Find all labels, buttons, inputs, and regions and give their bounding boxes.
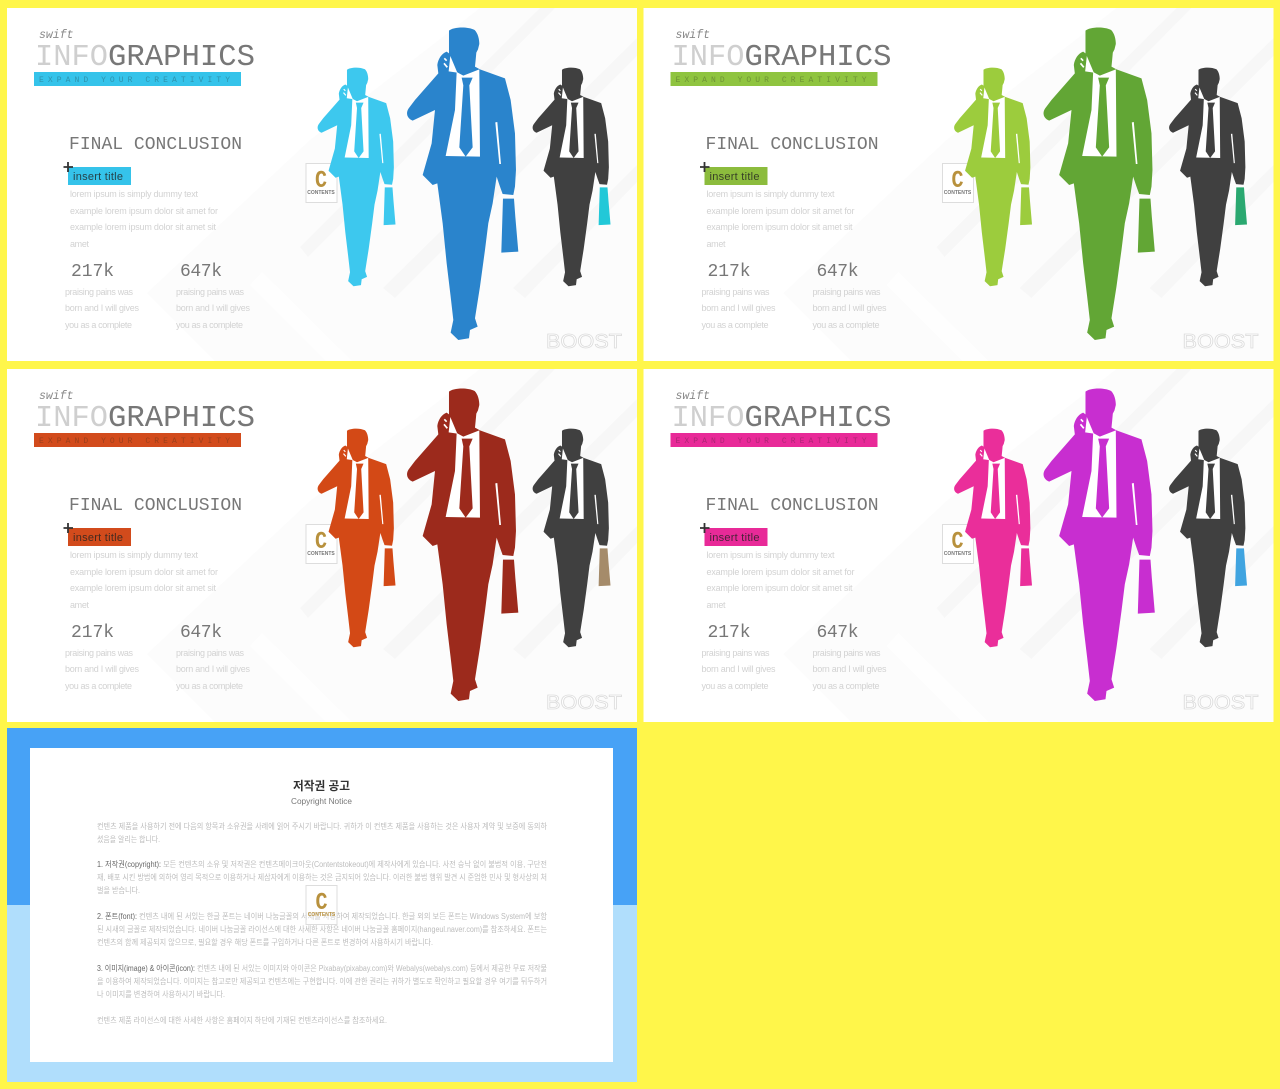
logo: C — [952, 529, 964, 556]
logo — [306, 524, 337, 564]
title: GRAPHICS — [744, 402, 892, 436]
insert title label — [700, 162, 768, 185]
panel: green slide — [644, 8, 1274, 361]
insert title label: insert title — [710, 532, 760, 544]
body text: example lorem ipsum dolor sit amet sit — [70, 222, 216, 232]
title: swift — [676, 390, 710, 403]
stat: 217k: 217k — [71, 623, 114, 643]
notice section 2: 컨텐츠의 함께 제공되지 않으므로, 필요할 경우 해당 폰트를 구입하거나 다른 폰트로 변경하여 사용하시기 바랍니다. — [97, 937, 433, 947]
notice intro: 셨음을 알리는 합니다. — [97, 834, 160, 844]
body text: lorem ipsum is simply dummy text — [706, 550, 835, 560]
logo: C — [316, 890, 328, 917]
subtitle bar: EXPAND YOUR CREATIVITY — [676, 437, 867, 446]
body text — [70, 550, 218, 610]
logo: CONTENTS — [308, 912, 336, 918]
insert title label: insert title — [710, 171, 760, 183]
notice section 3: 3. 이미지(image) & 아이콘(icon): — [97, 963, 195, 973]
title — [35, 29, 255, 75]
body text — [70, 189, 218, 249]
notice heading: 저작권 공고 — [293, 778, 350, 793]
silhouette: large man — [407, 28, 518, 340]
title: swift — [676, 29, 710, 42]
stat: 647k: you as a complete — [176, 320, 243, 330]
subtitle bar — [34, 72, 241, 86]
subtitle bar — [670, 433, 878, 447]
logo: C — [315, 529, 327, 556]
stat: 647k: born and I will gives — [812, 664, 887, 674]
stat: 647k: you as a complete — [812, 320, 880, 330]
stat: 647k: praising pains was — [176, 648, 244, 658]
silhouette: large man — [1044, 389, 1155, 701]
panel: copyright notice — [7, 728, 637, 1082]
heading: FINAL CONCLUSION — [69, 496, 242, 516]
logo — [942, 164, 974, 202]
stat: 647k: praising pains was — [812, 287, 881, 297]
stat: 647k: born and I will gives — [176, 303, 250, 313]
stat: 217k: born and I will gives — [65, 303, 140, 313]
title: GRAPHICS — [744, 41, 892, 75]
notice section 2: 2. 폰트(font): — [97, 912, 137, 921]
stat: 647k — [176, 623, 250, 691]
stat: 647k — [176, 262, 250, 330]
title: INFO — [672, 41, 744, 75]
logo: C — [315, 168, 327, 195]
insert title label — [700, 523, 768, 546]
stat: 217k — [65, 262, 140, 330]
notice section 3 — [97, 963, 547, 999]
stat: 647k: 647k — [816, 262, 858, 282]
silhouette: large man — [1044, 28, 1155, 340]
notice section 3: 나 이미지를 변경하여 사용하시기 바랍니다. — [97, 989, 225, 999]
silhouette: small man — [318, 68, 396, 286]
stat: 217k — [702, 623, 776, 691]
stat: 647k: 647k — [816, 623, 858, 643]
stat: 217k: 217k — [708, 262, 750, 282]
silhouette: dark man — [533, 429, 611, 647]
stat: 217k: born and I will gives — [65, 664, 140, 674]
notice section 3: 컨텐츠 내에 된 서있는 이미지와 아이콘은 Pixabay(pixabay.com)와 Webalys(webalys.com) 등에서 제공한 무료 저작물 — [197, 963, 547, 973]
stat: 217k — [702, 262, 776, 330]
heading: FINAL CONCLUSION — [706, 496, 878, 516]
notice section 1: 벌을 받습니다. — [97, 885, 140, 895]
stat: 647k: praising pains was — [176, 287, 244, 297]
subtitle bar: EXPAND YOUR CREATIVITY — [676, 76, 867, 85]
stat: 217k: praising pains was — [65, 287, 134, 297]
subtitle bar: EXPAND YOUR CREATIVITY — [39, 437, 230, 446]
title: GRAPHICS — [108, 402, 255, 436]
notice section 2 — [97, 911, 548, 947]
insert title label — [64, 523, 131, 546]
body text: lorem ipsum is simply dummy text — [70, 189, 198, 199]
stat: 647k: praising pains was — [812, 648, 881, 658]
title: GRAPHICS — [108, 41, 255, 75]
stat: 647k: born and I will gives — [812, 303, 887, 313]
silhouette: small man — [318, 429, 396, 647]
stat: 217k: 217k — [71, 262, 114, 282]
stat: 217k: you as a complete — [702, 681, 768, 691]
stat: 217k — [65, 623, 140, 691]
watermark: BOOST — [1182, 692, 1258, 714]
notice section 1: 재, 배포 시킨 방법에 의하여 영리 목적으로 이용하거나 제삼자에게 이용하는 것은 금지되어 있습니다. 이러한 불법 행위 발견 시 준엄한 민사 및 형사상의 처 — [97, 872, 547, 882]
notice heading — [291, 778, 352, 806]
title: swift — [39, 29, 74, 42]
silhouette: dark man — [1169, 429, 1247, 647]
stat: 217k: you as a complete — [65, 320, 132, 330]
body text: example lorem ipsum dolor sit amet sit — [70, 583, 216, 593]
stat: 217k: praising pains was — [702, 648, 770, 658]
body text: example lorem ipsum dolor sit amet for — [70, 206, 218, 216]
notice intro — [97, 821, 548, 844]
panel: magenta slide — [644, 369, 1274, 722]
logo: CONTENTS — [307, 190, 335, 196]
body text: example lorem ipsum dolor sit amet for — [706, 206, 854, 216]
body text — [706, 189, 854, 249]
logo: CONTENTS — [944, 551, 972, 557]
notice intro: 컨텐츠 제품을 사용하기 전에 다음의 항목과 소유권을 사례에 읽어 주시기 바랍니다. 귀하가 이 컨텐츠 제품을 사용하는 것은 사용자 계약 및 보증에 동의하 — [97, 821, 548, 831]
notice section 2: 된 시새의 글꼴로 제작되었습니다. 네이버 나눔글꼴 라이선스에 대한 사세한 사항은 네이버 나눔글꼴 홈페이지(hangeul.naver.com)를 참조하세요. 폰트는 — [97, 924, 547, 934]
notice section 1: 모든 컨텐츠의 소유 및 저작권은 컨텐츠메이크아웃(Contentstokeout)에 제작사에게 있습니다. 사전 승낙 없이 불법적 이용, 구단전 — [163, 859, 547, 869]
body text: lorem ipsum is simply dummy text — [70, 550, 198, 560]
silhouette: dark man — [533, 68, 611, 286]
notice section 3: 을 이용하여 제작되었습니다. 이미지는 참고로만 제공되고 컨텐츠에는 구현합니다. 이에 관한 권리는 귀하가 별도로 확인하고 필요할 경우 여기를 뒤두하거 — [97, 976, 547, 986]
stat: 647k: born and I will gives — [176, 664, 250, 674]
body text — [706, 550, 854, 610]
silhouette: small man — [954, 68, 1032, 286]
logo: CONTENTS — [307, 551, 335, 557]
watermark: BOOST — [546, 692, 622, 714]
title: INFO — [35, 402, 108, 436]
body text: amet — [706, 239, 726, 249]
notice heading: Copyright Notice — [291, 796, 352, 806]
stat: 647k — [812, 623, 887, 691]
stat: 217k: praising pains was — [65, 648, 134, 658]
body text: amet — [70, 239, 89, 249]
stat: 217k: you as a complete — [702, 320, 768, 330]
insert title label — [64, 162, 131, 185]
subtitle bar — [34, 433, 241, 447]
body text: example lorem ipsum dolor sit amet for — [706, 567, 854, 577]
insert title label: insert title — [73, 171, 123, 183]
stat: 647k: 647k — [180, 623, 222, 643]
silhouette: small man — [954, 429, 1032, 647]
stat: 217k: born and I will gives — [702, 303, 776, 313]
stat: 217k: born and I will gives — [702, 664, 776, 674]
stat: 217k: praising pains was — [702, 287, 770, 297]
insert title label: insert title — [73, 532, 123, 544]
subtitle bar — [670, 72, 878, 86]
title — [35, 390, 255, 436]
title: swift — [39, 390, 74, 403]
logo: C — [952, 168, 964, 195]
body text: example lorem ipsum dolor sit amet for — [70, 567, 218, 577]
notice footer: 컨텐츠 제품 라이선스에 대한 사세한 사항은 홈페이지 하단에 기재된 컨텐츠라이선스를 참조하세요. — [97, 1015, 387, 1025]
heading: FINAL CONCLUSION — [69, 135, 242, 155]
title: INFO — [35, 41, 108, 75]
silhouette: large man — [407, 389, 518, 701]
stat: 217k: you as a complete — [65, 681, 132, 691]
logo: CONTENTS — [944, 190, 972, 196]
panel: blue slide — [7, 8, 637, 361]
notice section 2: 컨텐츠 내에 된 서있는 한글 폰트는 네이버 나눔글꼴의 서체를 사용하여 제작되었습니다. 한글 외의 보든 폰트는 Windows System에 보함 — [139, 911, 548, 921]
body text: example lorem ipsum dolor sit amet sit — [706, 583, 853, 593]
heading: FINAL CONCLUSION — [706, 135, 878, 155]
stat: 647k: you as a complete — [176, 681, 243, 691]
stat: 647k — [812, 262, 887, 330]
title: INFO — [672, 402, 744, 436]
body text: lorem ipsum is simply dummy text — [706, 189, 835, 199]
stat: 647k: you as a complete — [812, 681, 880, 691]
body text: example lorem ipsum dolor sit amet sit — [706, 222, 853, 232]
logo — [306, 886, 337, 924]
logo — [306, 164, 337, 202]
panel: red slide — [7, 369, 637, 722]
stat: 217k: 217k — [708, 623, 750, 643]
watermark: BOOST — [546, 331, 622, 353]
subtitle bar: EXPAND YOUR CREATIVITY — [39, 76, 230, 85]
notice section 1: 1. 저작권(copyright): — [97, 859, 161, 869]
body text: amet — [70, 600, 89, 610]
watermark: BOOST — [1182, 331, 1258, 353]
silhouette: dark man — [1169, 68, 1247, 286]
body text: amet — [706, 600, 726, 610]
logo — [942, 524, 974, 564]
stat: 647k: 647k — [180, 262, 222, 282]
notice section 1 — [97, 859, 547, 895]
title — [672, 29, 892, 75]
title — [672, 390, 892, 436]
